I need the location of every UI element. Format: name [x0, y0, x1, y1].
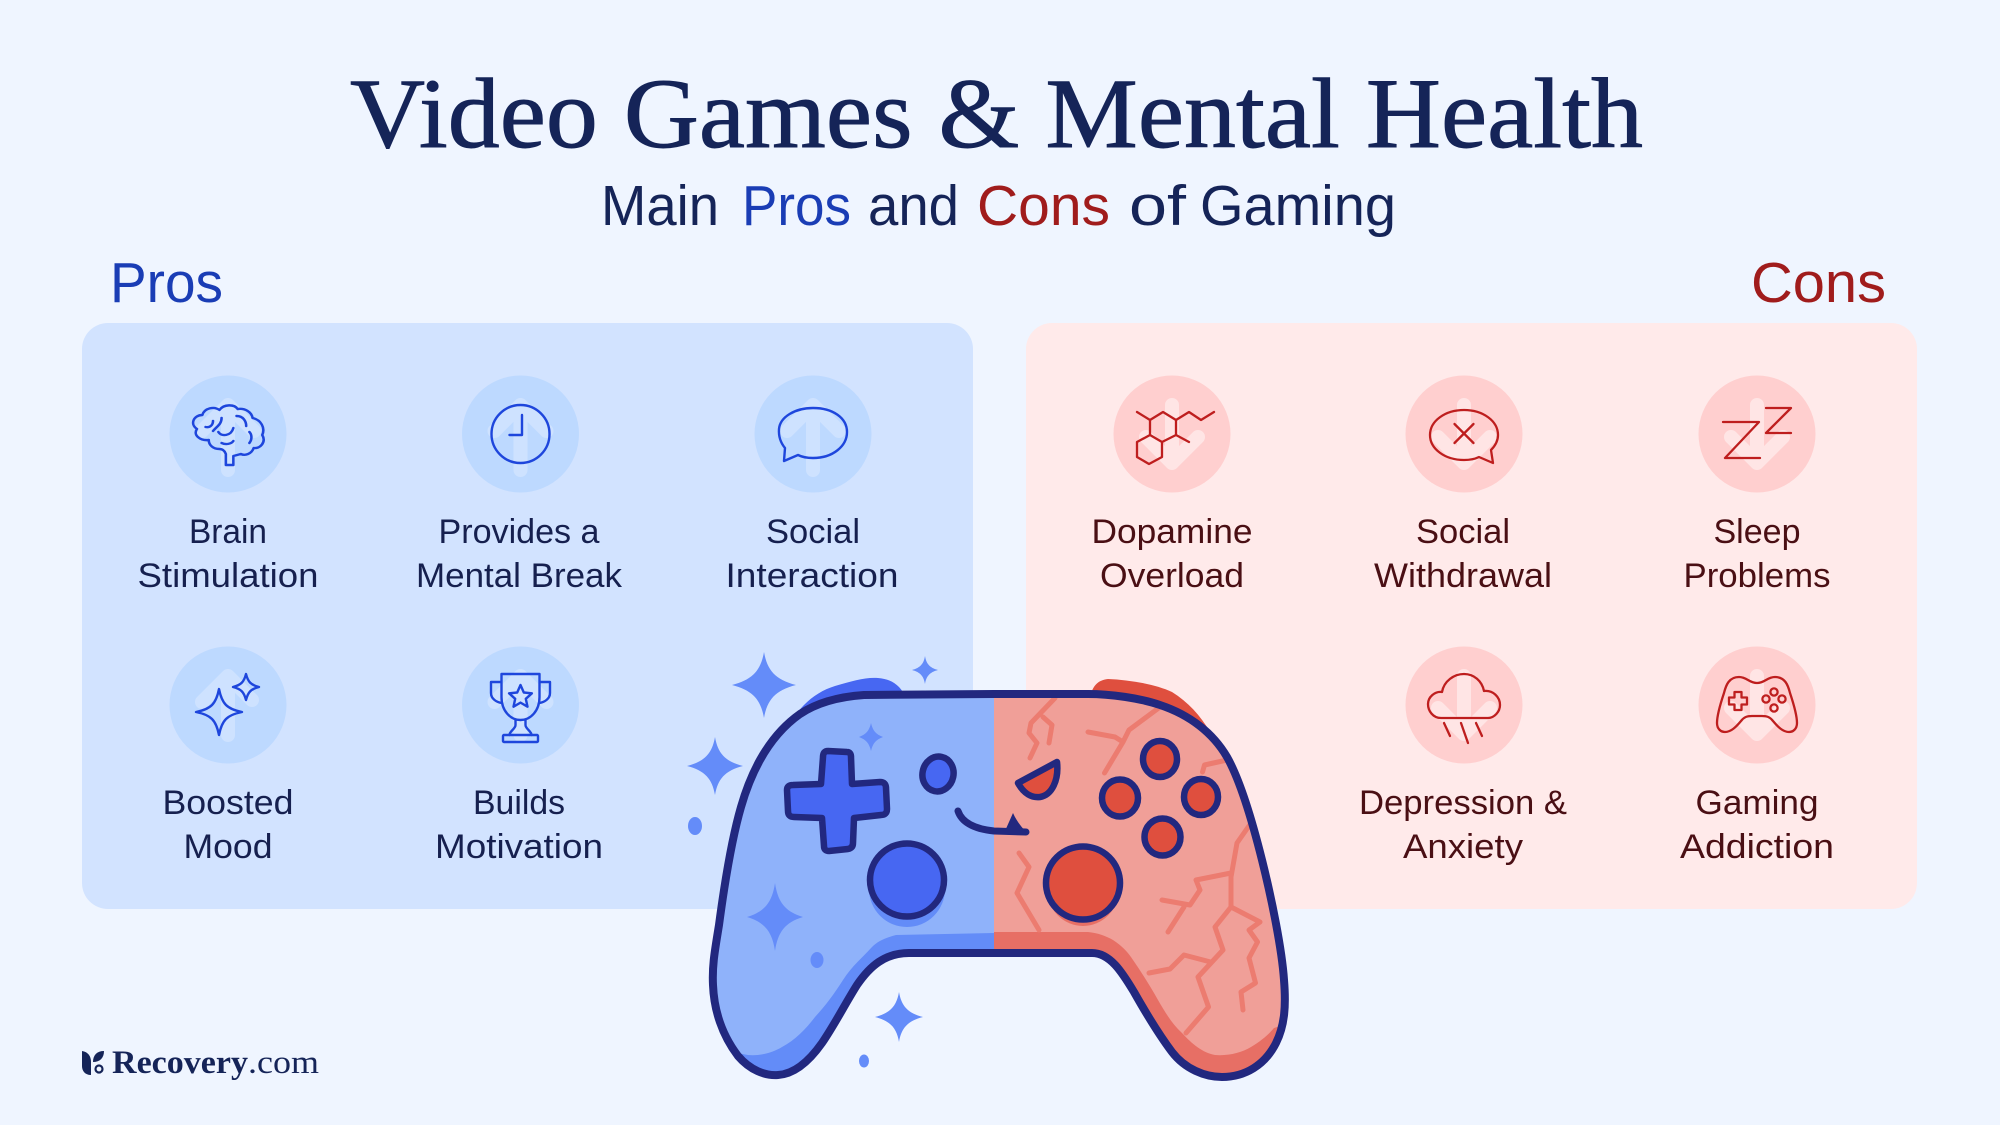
label: dopamine overload — [1092, 513, 1252, 595]
label: provides a mental break: Mental Break — [416, 557, 623, 595]
subtitle: Cons — [977, 174, 1110, 238]
icon: clock — [462, 376, 579, 492]
con item: gaming addiction — [1680, 646, 1834, 866]
label: social interaction: Social — [766, 513, 860, 551]
icon: molecule — [1114, 376, 1230, 492]
con item: social withdrawal — [1374, 376, 1552, 595]
pros panel background — [82, 323, 973, 909]
label: gaming addiction: Addiction — [1680, 828, 1834, 866]
label: gaming addiction — [1680, 784, 1834, 866]
right stick — [1046, 846, 1120, 920]
logo mark — [82, 1051, 104, 1075]
logo wordmark: Recovery — [112, 1045, 249, 1081]
con item: depression and anxiety — [1359, 646, 1567, 866]
icon: game controller — [1698, 646, 1816, 764]
pro item: builds motivation — [435, 646, 603, 866]
label: depression and anxiety: Depression & — [1359, 784, 1567, 822]
icon: sparkles — [170, 646, 286, 764]
con item: sleep problems — [1684, 376, 1830, 595]
label: brain stimulation: Brain — [189, 513, 267, 551]
label: dopamine overload: Overload — [1100, 557, 1244, 595]
subtitle: Pros — [742, 174, 851, 238]
label: sleep problems: Problems — [1684, 557, 1830, 595]
pro item: brain stimulation — [138, 376, 318, 595]
label: provides a mental break — [416, 513, 623, 595]
d-pad — [787, 751, 887, 851]
logo: Recovery.com — [82, 1045, 319, 1081]
stick shadows — [870, 894, 944, 927]
label: dopamine overload: Dopamine — [1092, 513, 1252, 551]
left bumper — [784, 678, 906, 740]
icon: brain — [170, 376, 286, 492]
right bumper — [1090, 679, 1210, 732]
left small button — [919, 754, 957, 794]
label: social withdrawal: Withdrawal — [1374, 557, 1552, 595]
label: sleep problems: Sleep — [1714, 513, 1800, 551]
panel: pros — [82, 323, 973, 909]
logo wordmark — [112, 1045, 319, 1081]
icon: trophy — [462, 646, 579, 764]
illustration: split game controller — [700, 678, 1300, 1090]
subtitle: of — [1129, 174, 1186, 238]
label: depression and anxiety — [1359, 784, 1567, 866]
sparkles on the controller — [747, 723, 883, 968]
label: gaming addiction: Gaming — [1696, 784, 1818, 822]
pro item: mental break — [416, 376, 623, 595]
controller outline — [713, 694, 1285, 1077]
smile with fang — [958, 811, 1028, 834]
label: social interaction — [726, 513, 898, 595]
controller body fills — [716, 698, 1281, 1073]
heading: pros: Pros — [110, 251, 223, 315]
icon: speech bubble with x — [1406, 376, 1522, 492]
logo wordmark: .com — [248, 1045, 319, 1081]
pro item: social interaction — [726, 376, 898, 595]
cons panel background — [1026, 323, 1917, 909]
label: boosted mood — [162, 784, 294, 866]
subtitle: Gaming — [1200, 174, 1396, 238]
icon: rain cloud — [1406, 646, 1522, 764]
label: brain stimulation: Stimulation — [138, 557, 318, 595]
label: sleep problems — [1684, 513, 1830, 595]
label: depression and anxiety: Anxiety — [1403, 828, 1523, 866]
sparkles around controller — [687, 652, 938, 1068]
subtitle: Main — [601, 174, 719, 238]
icon: speech bubble — [754, 376, 872, 492]
label: provides a mental break: Provides a — [438, 513, 600, 551]
label: social interaction: Interaction — [726, 557, 898, 595]
label: boosted mood: Mood — [184, 828, 272, 866]
label: social withdrawal: Social — [1416, 513, 1510, 551]
label: builds motivation — [435, 784, 603, 866]
icon: sleep zz — [1698, 376, 1816, 492]
label: boosted mood: Boosted — [162, 784, 294, 822]
subtitle — [601, 174, 1396, 238]
heading: cons: Cons — [1751, 251, 1886, 315]
label: builds motivation: Builds — [473, 784, 565, 822]
face buttons — [1102, 741, 1218, 856]
con item: dopamine overload — [1092, 376, 1252, 595]
angry eye — [1018, 762, 1057, 797]
label: social withdrawal — [1374, 513, 1552, 595]
left stick — [870, 844, 944, 916]
label: brain stimulation — [138, 513, 318, 595]
label: builds motivation: Motivation — [435, 828, 603, 866]
subtitle: and — [868, 174, 959, 238]
title: Video Games & Mental Health — [350, 58, 1643, 169]
pro item: boosted mood — [162, 646, 294, 866]
panel: cons — [1026, 323, 1917, 909]
